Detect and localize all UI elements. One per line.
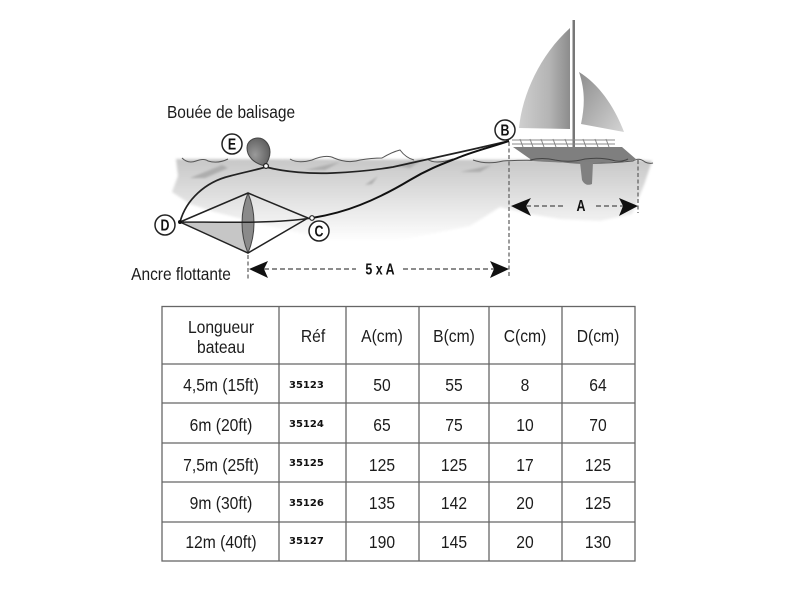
- heading: Ancre flottante: Ancre flottante: [131, 264, 231, 284]
- anchor shaded cone: [180, 223, 248, 253]
- table header row: bateau: [197, 337, 245, 357]
- size table: [162, 306, 635, 561]
- table row 35123: 64: [589, 375, 607, 395]
- table row 35127: 35127: [289, 536, 324, 547]
- table row 35126: 135: [369, 493, 395, 513]
- table row 35123: 4,5m (15ft): [183, 375, 259, 395]
- table row 35124: 10: [516, 415, 534, 435]
- dimension arrow: 5 x A: 5 x A: [365, 260, 395, 278]
- table header row: C(cm): [504, 326, 546, 346]
- jib sail: [579, 72, 624, 132]
- rope from C to B: [312, 141, 509, 218]
- dimension guide lines: [248, 142, 638, 280]
- sailboat: [512, 20, 637, 185]
- table row 35126: 20: [516, 493, 534, 513]
- buoy: [247, 138, 270, 168]
- table row 35126: 142: [441, 493, 467, 513]
- table row 35125: 125: [441, 455, 467, 475]
- table row 35127: 145: [441, 532, 467, 552]
- hull: [513, 147, 637, 163]
- rope knot C: [310, 216, 314, 220]
- table row 35126: [190, 493, 611, 513]
- table row 35126: 35126: [289, 498, 324, 509]
- mast: [572, 20, 575, 148]
- label E: E: [228, 135, 236, 153]
- dimension arrow: A: A: [577, 197, 585, 214]
- table row 35123: [183, 375, 607, 395]
- table grid: [162, 306, 635, 561]
- label D: [155, 215, 175, 235]
- table header row: [188, 317, 619, 357]
- table row 35127: 20: [516, 532, 534, 552]
- table row 35124: [190, 415, 607, 435]
- label E: [222, 134, 242, 154]
- table header row: A(cm): [361, 326, 403, 346]
- table header row: Réf: [301, 326, 325, 346]
- table row 35125: 125: [369, 455, 395, 475]
- dimension arrow: A: [511, 197, 638, 216]
- table row 35126: 9m (30ft): [190, 493, 252, 513]
- table row 35127: 130: [585, 532, 611, 552]
- table row 35123: 35123: [289, 380, 324, 391]
- sea background: [172, 158, 652, 240]
- table row 35125: 125: [585, 455, 611, 475]
- table row 35127: 12m (40ft): [185, 532, 257, 552]
- label B: B: [501, 121, 509, 139]
- anchor lines: [180, 193, 312, 253]
- table row 35126: 125: [585, 493, 611, 513]
- table row 35124: 75: [445, 415, 463, 435]
- table row 35125: 17: [516, 455, 534, 475]
- table row 35124: 6m (20ft): [190, 415, 252, 435]
- rope from D through buoy to B: [180, 141, 509, 222]
- table header row: D(cm): [577, 326, 619, 346]
- table row 35123: 50: [373, 375, 391, 395]
- rope knot D: [178, 220, 182, 224]
- table row 35123: 55: [445, 375, 463, 395]
- table header row: B(cm): [433, 326, 475, 346]
- water surface waves: [182, 150, 653, 163]
- table row 35125: 7,5m (25ft): [183, 455, 259, 475]
- railing: [512, 139, 615, 147]
- dimension arrow: 5 x A: [249, 260, 509, 278]
- main sail: [519, 28, 570, 129]
- table row 35127: 190: [369, 532, 395, 552]
- table row 35124: 35124: [289, 419, 324, 430]
- label C: C: [315, 222, 323, 240]
- anchor lens: [242, 193, 254, 253]
- table row 35125: 35125: [289, 458, 324, 469]
- heading: Bouée de balisage: Bouée de balisage: [167, 102, 295, 122]
- label D: D: [161, 216, 169, 234]
- table row 35125: [183, 455, 611, 475]
- table header row: Longueur: [188, 317, 254, 337]
- floating anchor: [180, 193, 312, 253]
- table row 35124: 70: [589, 415, 607, 435]
- keel: [580, 162, 593, 185]
- label B: [495, 120, 515, 140]
- table row 35127: [185, 532, 611, 552]
- table row 35124: 65: [373, 415, 391, 435]
- label C: [309, 221, 329, 241]
- table row 35123: 8: [521, 375, 529, 395]
